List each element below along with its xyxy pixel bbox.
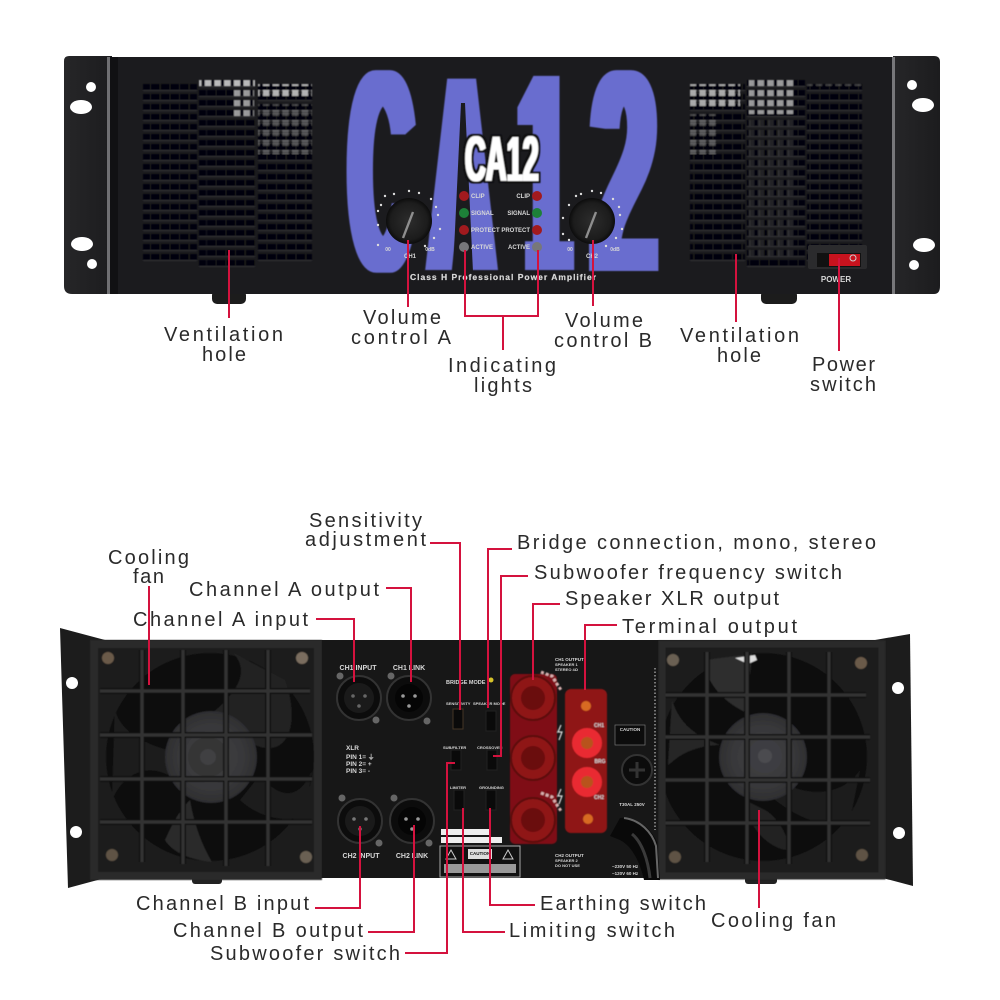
white serial label (441, 829, 502, 843)
large CA12 logo: C (350, 11, 412, 331)
left rack ear (64, 56, 118, 294)
line: sensitivity adjustment (430, 543, 460, 710)
output notes: STEREO 4Ω (555, 667, 579, 672)
label: sensitivity adjustment: adjustment (305, 529, 426, 551)
line: limiting switch (463, 808, 505, 932)
right rear ear (875, 634, 913, 886)
XLR pin legend: PIN 3= - (346, 768, 370, 775)
label: sensitivity adjustment: Sensitivity (309, 510, 422, 532)
rear view of amplifier (60, 628, 913, 888)
indicator lights A: PROTECT (471, 228, 500, 234)
front view of amplifier (64, 56, 940, 304)
output notes: CH1 OUTPUT (555, 657, 584, 662)
volume knob A: CH1 (404, 254, 417, 260)
caution label and fuse: T30AL 250V (619, 802, 645, 807)
label: terminal output: Terminal output (622, 616, 797, 638)
label: earthing switch: Earthing switch (540, 893, 706, 915)
output notes: SPEAKER 2 (555, 858, 578, 863)
caution label and fuse (615, 725, 652, 807)
left ventilation grille (143, 80, 312, 268)
DIP switches: GROUNDING (479, 785, 504, 790)
power switch (808, 245, 867, 284)
indicator lights B (501, 191, 542, 252)
indicator lights B: PROTECT (501, 228, 530, 234)
label: limiting switch: Limiting switch (509, 920, 675, 942)
large CA12 logo (346, 69, 660, 274)
label: indicating lights: lights (474, 375, 532, 397)
line: indicating lights (465, 250, 538, 350)
model caption: Class H Professional Power Amplifier (410, 272, 597, 282)
line: cooling fan left (148, 586, 150, 685)
XLR connector CH1 link: CH1 LINK (393, 665, 425, 672)
red binding post terminals: CH1 (594, 723, 604, 729)
red binding post terminals (565, 689, 607, 833)
volume knob B: CH2 (586, 254, 599, 260)
front chassis panel (112, 57, 896, 294)
line: channel A output (386, 588, 411, 682)
output notes (555, 657, 639, 876)
power cable (610, 818, 660, 880)
rubber feet front (212, 290, 797, 304)
volume knob B: 0dB (610, 247, 620, 253)
volume knob A (377, 190, 441, 260)
label: ventilation hole right: hole (717, 345, 761, 367)
line: channel A input (316, 619, 354, 682)
label: volume control A: Volume (363, 307, 441, 329)
right cooling fan (659, 644, 882, 876)
rubber feet rear (192, 876, 777, 884)
volume knob B (562, 190, 623, 260)
caution label and fuse: CAUTION (620, 727, 640, 732)
DIP switches: SENSITIVITY (446, 701, 471, 706)
label: indicating lights: Indicating (448, 355, 556, 377)
XLR pin legend: PIN 2= + (346, 761, 372, 768)
output notes: ~230V 50 Hz (612, 864, 639, 869)
XLR pin legend: XLR (346, 745, 359, 752)
power switch: POWER (821, 275, 851, 284)
DIP switches: CROSSOVER (477, 745, 503, 750)
right rack ear (892, 56, 940, 294)
red binding post terminals: BRG (594, 759, 606, 765)
label: channel B output: Channel B output (173, 920, 363, 942)
label: channel A input: Channel A input (133, 609, 308, 631)
label: volume control B: control B (554, 330, 652, 352)
XLR pin legend (346, 745, 374, 775)
label: ventilation hole right: Ventilation (680, 325, 799, 347)
output notes: DO NOT USE (555, 863, 580, 868)
output notes: CH2 OUTPUT (555, 853, 584, 858)
output notes: ~120V 60 Hz (612, 871, 639, 876)
DIP switches: LIMITER (450, 785, 466, 790)
volume knob A: 00 (385, 247, 391, 253)
warning label (440, 846, 520, 877)
bridge mode indicator (446, 678, 494, 686)
indicator lights A: CLIP (471, 194, 485, 200)
XLR connector CH1 input (336, 665, 381, 724)
XLR connector CH2 input: CH2 INPUT (343, 853, 380, 860)
indicator lights B: CLIP (516, 194, 530, 200)
line: channel B output (368, 825, 414, 932)
right ventilation grille (690, 80, 862, 268)
line: cooling fan right (758, 810, 760, 908)
perforated strip (654, 668, 656, 830)
small CA12 logo: CA12 (465, 123, 539, 195)
indicator lights A (459, 191, 500, 252)
warning label: CAUTION (470, 851, 490, 856)
label: channel B input: Channel B input (136, 893, 309, 915)
XLR connector CH2 link (390, 794, 434, 860)
line: ventilation hole right (735, 254, 737, 322)
rear chassis panel (90, 640, 890, 878)
callout lines (149, 240, 839, 953)
line: channel B input (315, 826, 360, 908)
large CA12 logo: 2 (592, 12, 656, 333)
indicator lights A: ACTIVE (471, 245, 493, 251)
large CA12 logo: 1 (518, 15, 570, 330)
large CA12 logo: A (430, 18, 493, 329)
indicator lights B: SIGNAL (507, 211, 530, 217)
line: volume control B (592, 240, 594, 306)
label: ventilation hole left: hole (202, 344, 246, 366)
DIP switches (443, 701, 506, 810)
volume knob B: 00 (567, 247, 573, 253)
label: cooling fan left: Cooling (108, 547, 189, 569)
label: speaker XLR output: Speaker XLR output (565, 588, 779, 610)
rear connector panel (322, 640, 658, 878)
line: ventilation hole left (228, 250, 230, 318)
line: subwoofer switch (405, 763, 455, 953)
volume knob A: 0dB (425, 247, 435, 253)
label: power switch: switch (810, 374, 876, 396)
indicator lights B: ACTIVE (508, 245, 530, 251)
label: subwoofer frequency switch: Subwoofer frequency switch (534, 562, 842, 584)
label: subwoofer switch: Subwoofer switch (210, 943, 400, 965)
bridge mode indicator: BRIDGE MODE (446, 680, 486, 686)
label: cooling fan left: fan (133, 566, 164, 588)
label: volume control B: Volume (565, 310, 643, 332)
line: speaker XLR output (533, 604, 560, 680)
line: subwoofer frequency (493, 576, 528, 756)
gap inside letter A (453, 103, 473, 272)
red speaker output strip (510, 672, 562, 844)
line: terminal output (585, 625, 617, 690)
label: power switch: Power (812, 354, 875, 376)
left cooling fan (94, 644, 318, 876)
red binding post terminals: CH2 (594, 795, 604, 801)
label: ventilation hole left: Ventilation (164, 324, 283, 346)
output notes: SPEAKER 1 (555, 662, 578, 667)
XLR connector CH1 input: CH1 INPUT (340, 665, 377, 672)
line: earthing switch (490, 808, 535, 905)
XLR connector CH1 link (387, 665, 431, 724)
label: bridge connection: Bridge connection, mono, stereo (517, 532, 876, 554)
left rear ear (60, 628, 105, 888)
XLR pin legend: PIN 1= ⏚ (346, 753, 374, 761)
DIP switches: SPEAKER MODE (473, 701, 506, 706)
label: cooling fan right: Cooling fan (711, 910, 836, 932)
DIP switches: SUB/FILTER (443, 745, 466, 750)
line: bridge connection (488, 549, 512, 708)
line: volume control A (407, 240, 409, 307)
label: volume control A: control A (351, 327, 452, 349)
XLR connector CH2 input (338, 794, 382, 860)
XLR connector CH2 link: CH2 LINK (396, 853, 428, 860)
indicator lights A: SIGNAL (471, 211, 494, 217)
line: power switch (838, 258, 840, 351)
label: channel A output: Channel A output (189, 579, 379, 601)
